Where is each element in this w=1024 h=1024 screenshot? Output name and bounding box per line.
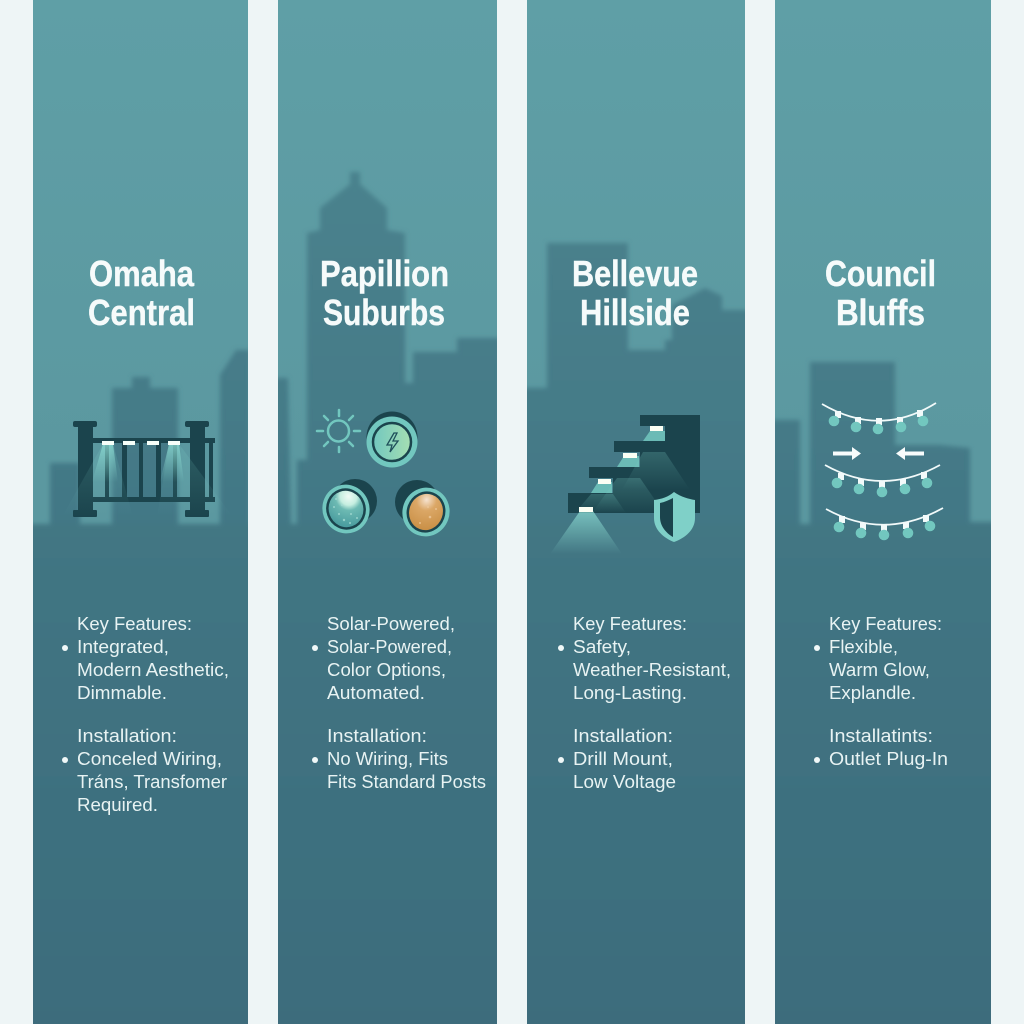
title: Bellevue Hillside [572,253,698,333]
icon: railing lights [62,421,233,517]
title: Papillion Suburbs: Suburbs [323,292,445,333]
title: Council Bluffs: Council [825,253,936,294]
panel: Council Bluffs [770,0,996,1024]
title: Omaha Central: Central [88,292,195,333]
text: Council Bluffs details: Warm Glow, [829,660,930,680]
text: Council Bluffs details: Flexible, [829,637,898,657]
text: Bellevue Hillside details: Drill Mount, [573,749,673,769]
title: Omaha Central [88,253,195,333]
icon: solar and color lights [316,410,456,543]
text: Bellevue Hillside details: Key Features: [573,614,687,634]
skyline: Omaha Central [28,350,253,1024]
text: Papillion Suburbs details: Solar-Powered, [327,637,452,657]
icon: shield [654,492,695,542]
icon: sun [317,410,360,452]
title: Council Bluffs [825,253,936,333]
text: Bellevue Hillside details [558,614,731,792]
text: Papillion Suburbs details: Installation: [327,726,427,746]
text: Bellevue Hillside details: Installation: [573,726,673,746]
title: Omaha Central: Omaha [89,253,195,294]
title: Bellevue Hillside: Hillside [580,292,690,333]
text: Omaha Central details: Key Features: [77,614,192,634]
text: Omaha Central details: Modern Aesthetic, [77,660,229,680]
text: Papillion Suburbs details: No Wiring, Fits [327,749,448,769]
panel: Omaha Central [28,0,253,1024]
icon: amber light [395,480,456,543]
text: Council Bluffs details [814,614,948,769]
text: Council Bluffs details: Explandle. [829,683,916,703]
string 1 [822,403,936,434]
title: Papillion Suburbs: Papillion [320,253,449,294]
text: Papillion Suburbs details: Color Options, [327,660,446,680]
text: Omaha Central details: Installation: [77,726,177,746]
text: Council Bluffs details: Key Features: [829,614,942,634]
icon: step lights with shield [550,415,700,554]
text: Omaha Central details: Required. [77,795,158,815]
text: Bellevue Hillside details: Long-Lasting. [573,683,687,703]
text: Papillion Suburbs details: Solar-Powered, [327,614,455,634]
text: Council Bluffs details: Outlet Plug-In [829,749,948,769]
text: Bellevue Hillside details: Low Voltage [573,772,676,792]
text: Papillion Suburbs details [312,614,486,792]
icon: solar light [366,412,418,468]
title: Papillion Suburbs [320,253,449,333]
string 3 [826,508,943,540]
title: Bellevue Hillside: Bellevue [572,253,698,294]
text: Papillion Suburbs details: Automated. [327,683,425,703]
text: Omaha Central details: Dimmable. [77,683,167,703]
skyline: Papillion Suburbs [270,172,502,1024]
text: Omaha Central details: Conceled Wiring, [77,749,222,769]
arrows [833,447,924,460]
text: Omaha Central details: Integrated, [77,637,169,657]
skyline: Bellevue Hillside [520,243,750,1024]
string 2 [825,465,940,497]
title: Council Bluffs: Bluffs [836,292,925,333]
text: Papillion Suburbs details: Fits Standard Posts [327,772,486,792]
text: Council Bluffs details: Installatints: [829,726,933,746]
icon: teal light [316,478,377,540]
icon: string lights [822,403,943,540]
text: Omaha Central details [62,614,229,815]
text: Omaha Central details: Tráns, Transfomer [77,772,227,792]
skyline: Council Bluffs [770,362,996,1024]
panel: Bellevue Hillside [520,0,750,1024]
panel: Papillion Suburbs [270,0,502,1024]
text: Bellevue Hillside details: Safety, [573,637,631,657]
text: Bellevue Hillside details: Weather-Resistant, [573,660,731,680]
